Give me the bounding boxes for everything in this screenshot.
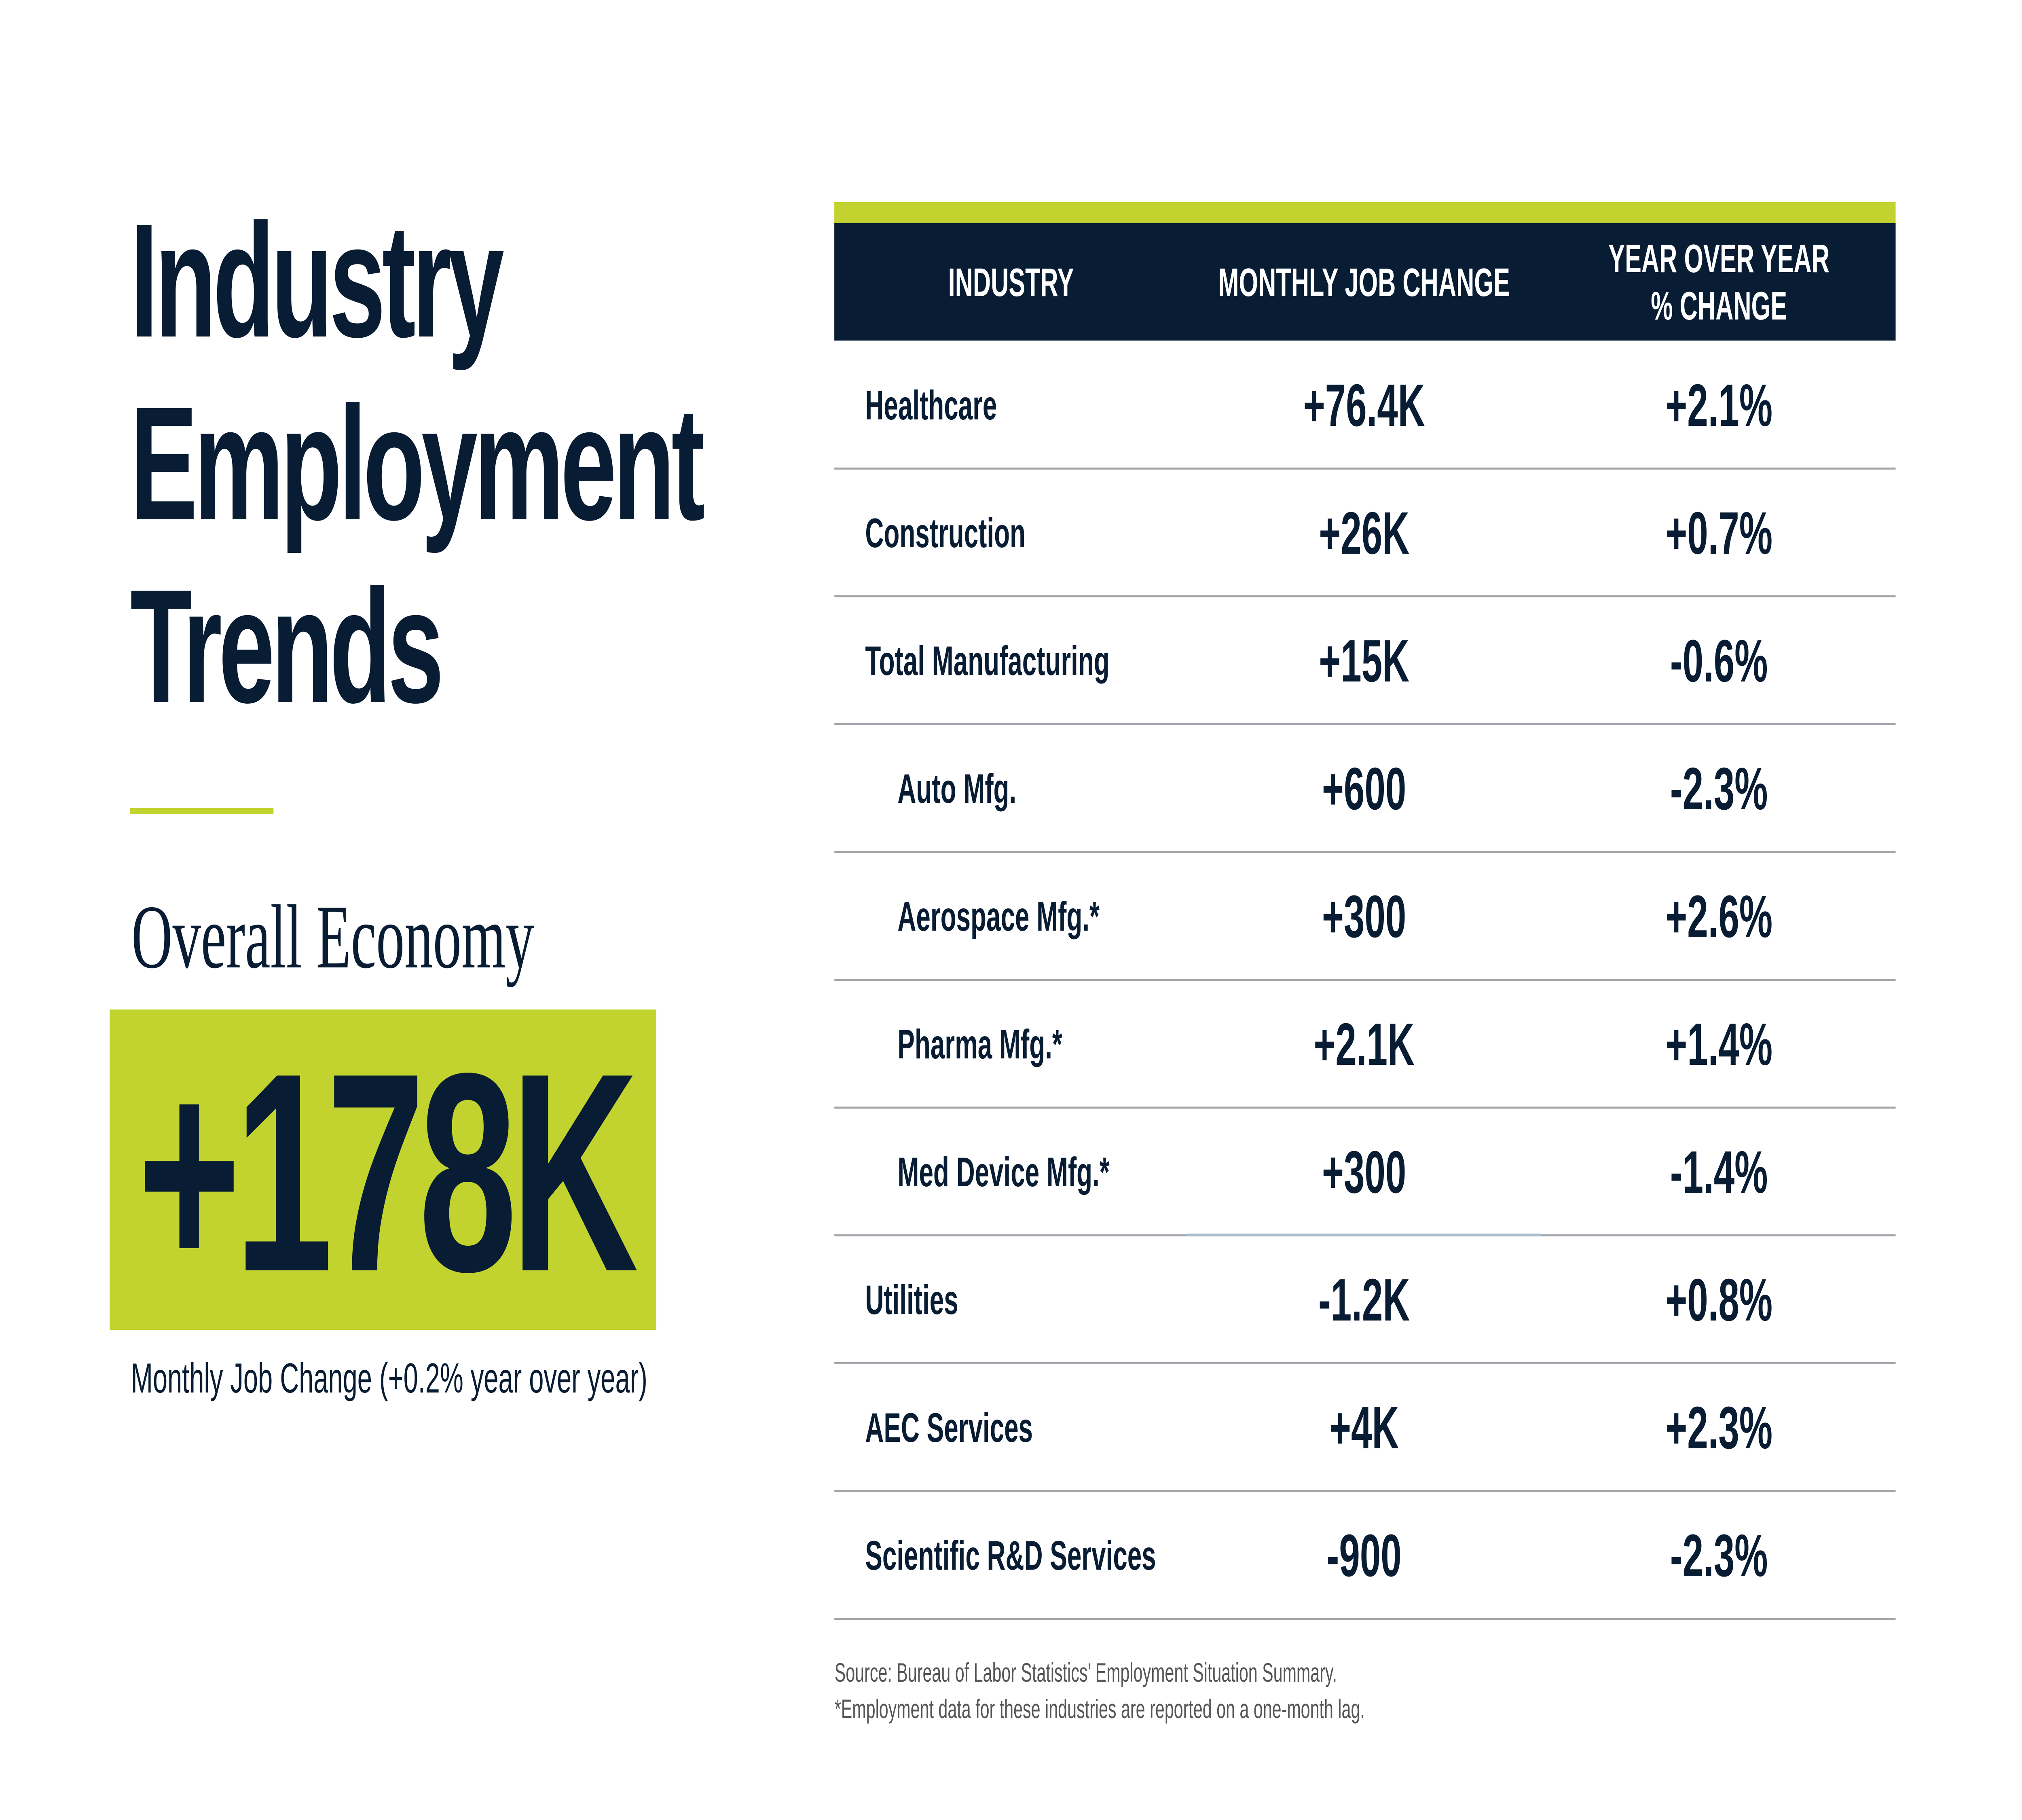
row: AEC Services: +4K	[1329, 1395, 1399, 1461]
row: Med Device Mfg: +300	[1322, 1139, 1406, 1206]
row: AEC Services: +2.3%	[1665, 1395, 1772, 1461]
row: Med Device Mfg	[834, 1139, 1896, 1236]
row: Pharma Mfg	[834, 1011, 1896, 1109]
row: Aerospace Mfg: +300	[1322, 883, 1406, 950]
row: Med Device Mfg: Med Device Mfg.*	[897, 1149, 1110, 1196]
row: AEC Services	[834, 1395, 1896, 1492]
accent line	[130, 808, 273, 814]
row: Scientific R&D: Scientific R&D Services	[865, 1533, 1156, 1579]
row: Auto Mfg: +600	[1322, 756, 1406, 822]
source note: Source: Bureau of Labor Statistics’ Employment Situation Summary.	[835, 1657, 1337, 1687]
subheading: overall economy: Overall Economy	[131, 887, 534, 987]
row: Utilities	[834, 1267, 1896, 1364]
row: Construction	[834, 500, 1896, 597]
row: Healthcare: +2.1%	[1665, 372, 1772, 439]
row: Construction: +0.7%	[1665, 500, 1772, 567]
big number: +178K	[137, 1014, 638, 1331]
row: Aerospace Mfg: +2.6%	[1665, 883, 1772, 950]
row: Healthcare: +76.4K	[1303, 372, 1425, 439]
row: Auto Mfg	[834, 756, 1896, 853]
table header	[834, 202, 1896, 341]
row: Utilities: Utilities	[865, 1277, 958, 1323]
header: year over year: YEAR OVER YEAR	[1608, 237, 1830, 281]
row: Utilities: -1.2K	[1318, 1267, 1410, 1333]
row: Construction: Construction	[865, 510, 1026, 557]
row: Scientific R&D: -2.3%	[1670, 1522, 1768, 1589]
row: Aerospace Mfg: Aerospace Mfg.*	[897, 894, 1100, 940]
highlight box: +178K	[110, 1009, 656, 1331]
title	[130, 190, 704, 736]
row: Pharma Mfg: Pharma Mfg.*	[897, 1022, 1062, 1068]
header: monthly job change: MONTHLY JOB CHANGE	[1218, 260, 1510, 305]
source note: *Employment data for these industries are reported on a one-month lag.	[835, 1694, 1365, 1724]
row: Utilities: +0.8%	[1665, 1267, 1772, 1333]
row: Total Manufacturing: Total Manufacturing	[865, 638, 1110, 684]
row: Scientific R&D: -900	[1327, 1522, 1402, 1589]
row: Auto Mfg: Auto Mfg.	[897, 766, 1016, 812]
row: Total Manufacturing: +15K	[1319, 628, 1409, 694]
row: Healthcare	[834, 372, 1896, 470]
caption: Monthly Job Change (+0.2% year over year)	[131, 1354, 647, 1402]
source note	[835, 1657, 1365, 1724]
row: Total Manufacturing: -0.6%	[1670, 628, 1768, 694]
header: year over year: % CHANGE	[1651, 284, 1787, 328]
row: Aerospace Mfg	[834, 883, 1896, 981]
row: Pharma Mfg: +1.4%	[1665, 1011, 1772, 1078]
row: AEC Services: AEC Services	[865, 1405, 1033, 1451]
row: Total Manufacturing	[834, 628, 1896, 725]
header: industry: INDUSTRY	[948, 260, 1074, 305]
row: Construction: +26K	[1319, 500, 1409, 567]
row: Auto Mfg: -2.3%	[1670, 756, 1768, 822]
row: Med Device Mfg: -1.4%	[1670, 1139, 1768, 1206]
table rows	[834, 372, 1896, 1620]
title: Industry	[130, 190, 505, 372]
row: Healthcare: Healthcare	[865, 383, 997, 429]
title: Employment	[130, 373, 704, 554]
title: Trends	[130, 556, 440, 736]
row: Scientific R&D	[834, 1522, 1896, 1620]
row: Pharma Mfg: +2.1K	[1313, 1011, 1415, 1078]
